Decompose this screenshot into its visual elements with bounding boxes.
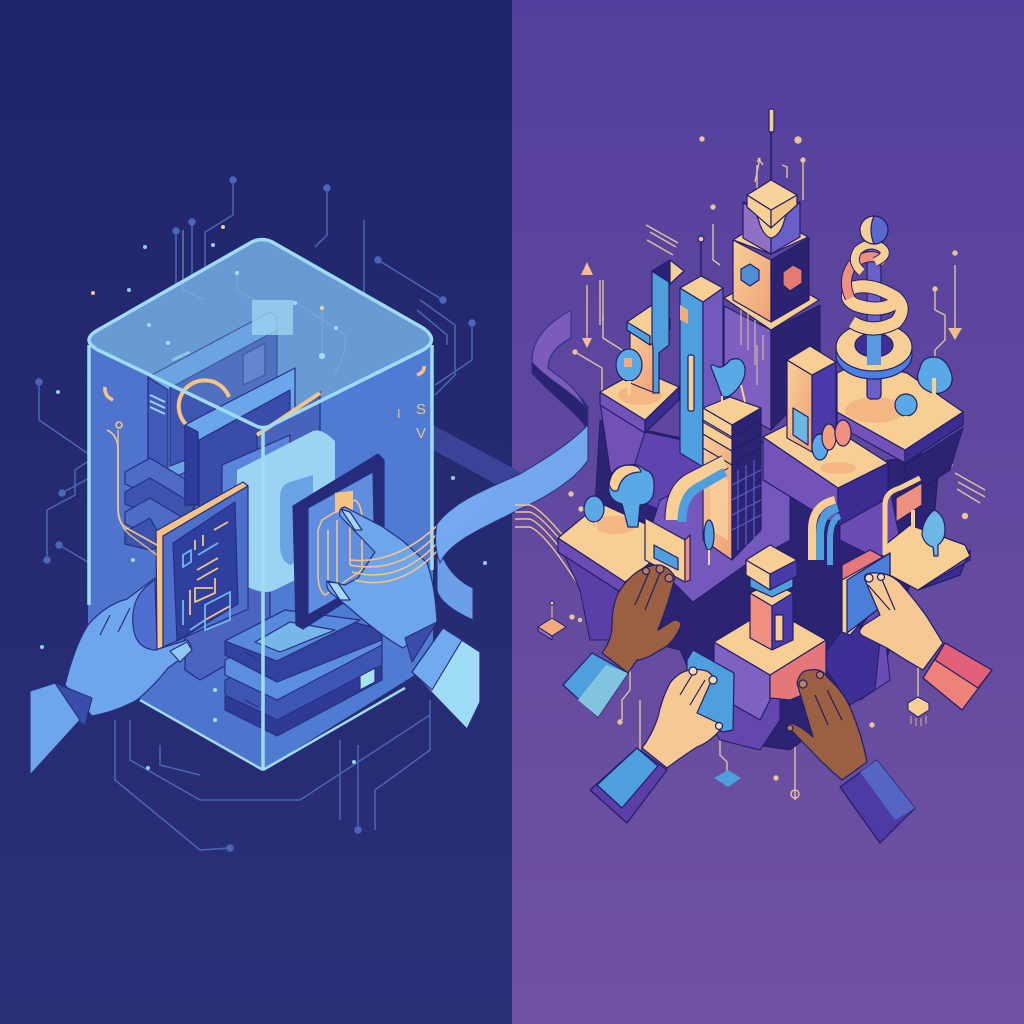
round tree <box>616 349 642 381</box>
gate building <box>645 518 685 582</box>
ribbon dark back <box>532 357 588 430</box>
second device <box>185 368 295 515</box>
left robot hand <box>30 578 192 775</box>
back device <box>148 312 277 480</box>
bird topper <box>711 359 745 397</box>
signboard <box>885 478 920 555</box>
central tower <box>724 109 820 430</box>
ribbon blue band <box>436 425 588 563</box>
right tablet <box>293 454 384 629</box>
center platform with building <box>763 346 888 526</box>
third device, gold edge <box>222 392 320 510</box>
blue tall tower <box>680 236 723 467</box>
stacked base: back left <box>125 458 195 550</box>
arrows <box>581 262 962 348</box>
blue book <box>842 553 890 635</box>
big tree <box>609 465 654 527</box>
mid floor <box>643 440 790 602</box>
gold dial <box>179 380 229 429</box>
pillar band <box>750 575 793 597</box>
pillar base <box>750 593 772 650</box>
connector band behind ribbon <box>433 425 520 492</box>
small round tree <box>584 496 604 522</box>
lower-left platform with tree and gate <box>558 462 725 595</box>
big ring <box>836 331 912 379</box>
cream and grid tower <box>703 359 761 560</box>
cream building <box>787 360 812 452</box>
right platform <box>837 412 905 463</box>
flag tower <box>652 271 669 393</box>
wires crossing to islands <box>515 505 640 602</box>
ribbon lower fold <box>437 540 473 620</box>
tree <box>922 510 945 556</box>
antenna <box>770 132 772 190</box>
right lower platform <box>842 478 970 635</box>
cube inner dots <box>131 271 338 722</box>
ribbon <box>436 310 588 620</box>
pillar top <box>746 560 770 590</box>
spiral tower on right platform <box>836 216 963 463</box>
pole <box>867 235 881 399</box>
left tablet <box>156 482 248 650</box>
central light block <box>237 430 335 592</box>
panel: left background <box>0 0 512 1024</box>
cube wall glyphs: S <box>416 401 426 418</box>
cube edges <box>89 240 432 770</box>
left platform with small building <box>600 260 684 433</box>
cube wall glyphs <box>397 401 426 442</box>
small building <box>630 330 655 393</box>
hand: brown bottom <box>787 670 915 843</box>
cube right face <box>263 342 433 770</box>
window icons <box>741 264 759 286</box>
cube top face <box>89 240 432 428</box>
cap <box>743 202 771 254</box>
small trees <box>812 434 828 460</box>
blue pipes <box>812 500 835 560</box>
tower light streaks <box>741 310 763 385</box>
cube wall glyphs: I <box>397 406 401 421</box>
gold curved markers and wires <box>105 366 440 583</box>
circuit lines: left panel <box>36 177 487 851</box>
third tier <box>733 240 771 322</box>
front block <box>714 642 770 720</box>
spiral coils <box>848 286 902 328</box>
lower tier <box>724 306 771 430</box>
top cube <box>747 195 771 228</box>
lower stack <box>225 610 382 736</box>
hand: cream top right <box>860 573 992 710</box>
right robot hand <box>327 507 480 729</box>
island rock body <box>560 402 963 750</box>
cube wall glyphs: V <box>416 425 426 442</box>
small blue book, lower <box>687 650 734 732</box>
pillar on front block <box>714 500 840 720</box>
hand: cream bottom <box>590 667 722 823</box>
bright square <box>252 300 293 335</box>
ball top <box>860 216 888 244</box>
hand: brown top left <box>563 565 681 717</box>
panel: right background <box>512 0 1024 1024</box>
translucent top overlay <box>89 240 432 428</box>
lower vertical device <box>185 560 270 680</box>
cube left face <box>88 344 263 770</box>
small floating tiles and chip <box>538 601 929 798</box>
pipe arch <box>672 462 725 520</box>
trees <box>918 357 952 393</box>
ribbon light upper band <box>532 310 586 408</box>
block behind book <box>842 550 885 590</box>
top face inner traces <box>183 230 345 375</box>
cube: glass body <box>30 109 992 843</box>
circuit lines: right panel <box>569 137 985 800</box>
